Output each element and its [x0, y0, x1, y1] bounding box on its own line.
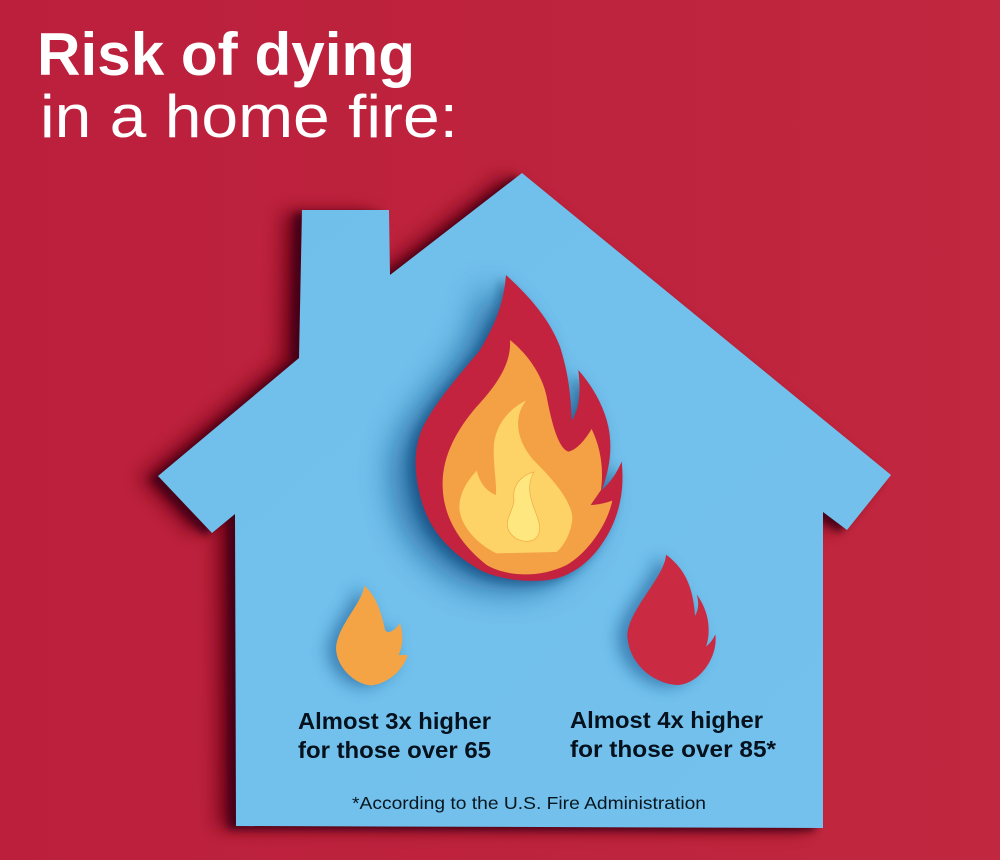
title — [37, 21, 458, 150]
label: over 85 — [570, 707, 776, 762]
house shadow — [139, 175, 883, 831]
icon: large layered flame — [392, 275, 623, 591]
label: over 65 — [298, 708, 491, 763]
label: over 65: Almost 3x higher — [298, 708, 491, 734]
icon: small red flame — [617, 555, 716, 687]
title: in a home fire: — [40, 83, 458, 150]
house: blue paper cut-out — [158, 173, 891, 828]
icon: small orange flame — [327, 586, 408, 687]
label: over 85: Almost 4x higher — [570, 707, 763, 733]
title: Risk of dying — [37, 21, 415, 88]
source note: *According to the U.S. Fire Administration — [352, 793, 706, 813]
label: over 85: for those over 85* — [570, 736, 776, 762]
label: over 65: for those over 65 — [298, 737, 491, 763]
